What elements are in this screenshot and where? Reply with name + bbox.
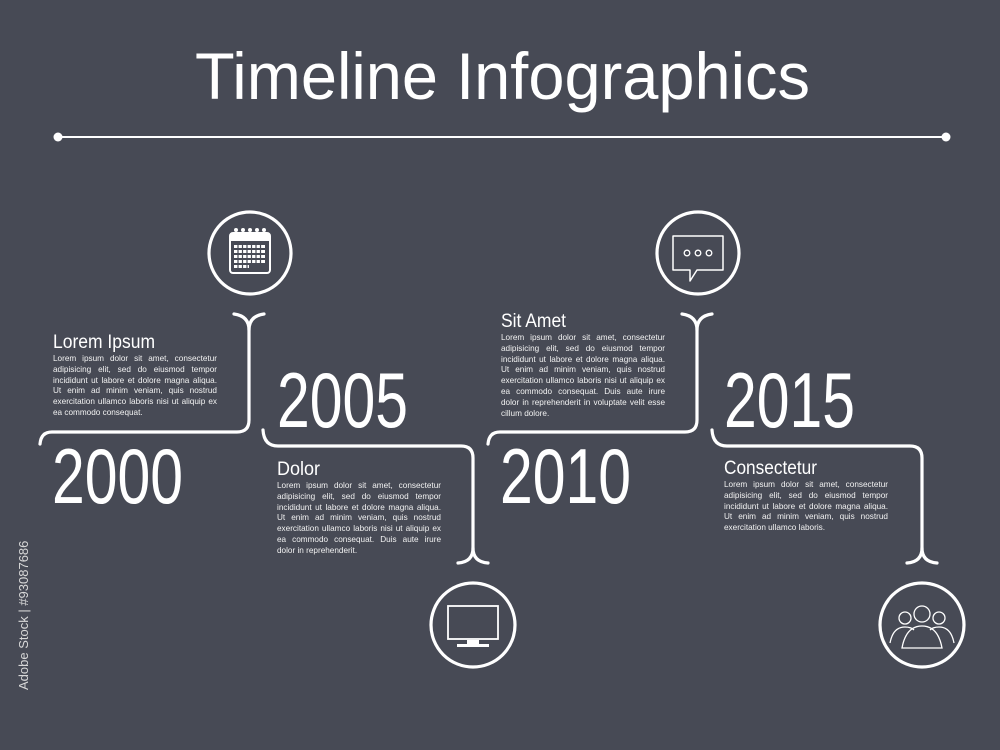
side credit: Adobe Stock | #93087686 (16, 541, 31, 690)
year 2010: 2010 (500, 432, 631, 520)
title: Timeline Infographics (195, 39, 810, 113)
hooks (234, 314, 922, 563)
year 2000: 2000 (52, 432, 183, 520)
heading: Consectetur: Consectetur (724, 458, 818, 479)
year 2005: 2005 (277, 356, 408, 444)
icon: chat bubble (657, 212, 739, 294)
connector 2000 (40, 314, 264, 444)
text: Sit Amet body: Lorem ipsum dolor sit amet, consectetur adipisicing elit, sed do eiusmod tempor incididunt ut labore et dolore magna aliqua. Ut enim ad minim veniam, quis nostrud exercitation ullamco laboris nisi ut aliquip ex ea commodo consequat. Duis aute irure dolor in reprehenderit in voluptate velit esse cillum dolore. (501, 333, 665, 418)
icon: monitor (431, 583, 515, 667)
connector 2015 (712, 430, 937, 563)
text: Consectetur body: Lorem ipsum dolor sit amet, consectetur adipisicing elit, sed do eiusmod tempor incididunt ut labore et dolore magna aliqua. Ut enim ad minim veniam, quis nostrud exercitation ullamco laboris. (724, 480, 888, 532)
icon: calendar (209, 212, 291, 294)
heading: Sit Amet: Sit Amet (501, 311, 567, 332)
title underline (54, 132, 950, 142)
heading: Dolor: Dolor (277, 459, 321, 480)
connector 2005 (263, 430, 488, 563)
text: Lorem Ipsum body: Lorem ipsum dolor sit amet, consectetur adipisicing elit, sed do eiusmod tempor incididunt ut labore et dolore magna aliqua. Ut enim ad minim veniam, quis nostrud exercitation ullamco laboris nisi ut aliquip ex ea commodo consequat. (53, 354, 217, 417)
heading: Lorem Ipsum: Lorem Ipsum (53, 332, 155, 353)
year 2015: 2015 (724, 356, 855, 444)
icon: people (880, 583, 964, 667)
connector 2010 (488, 314, 712, 444)
text: Dolor body: Lorem ipsum dolor sit amet, consectetur adipisicing elit, sed do eiusmod tempor incididunt ut labore et dolore magna aliqua. Ut enim ad minim veniam, quis nostrud exercitation ullamco laboris nisi ut aliquip ex ea commodo consequat. Duis aute irure dolor in reprehenderit. (277, 481, 441, 555)
